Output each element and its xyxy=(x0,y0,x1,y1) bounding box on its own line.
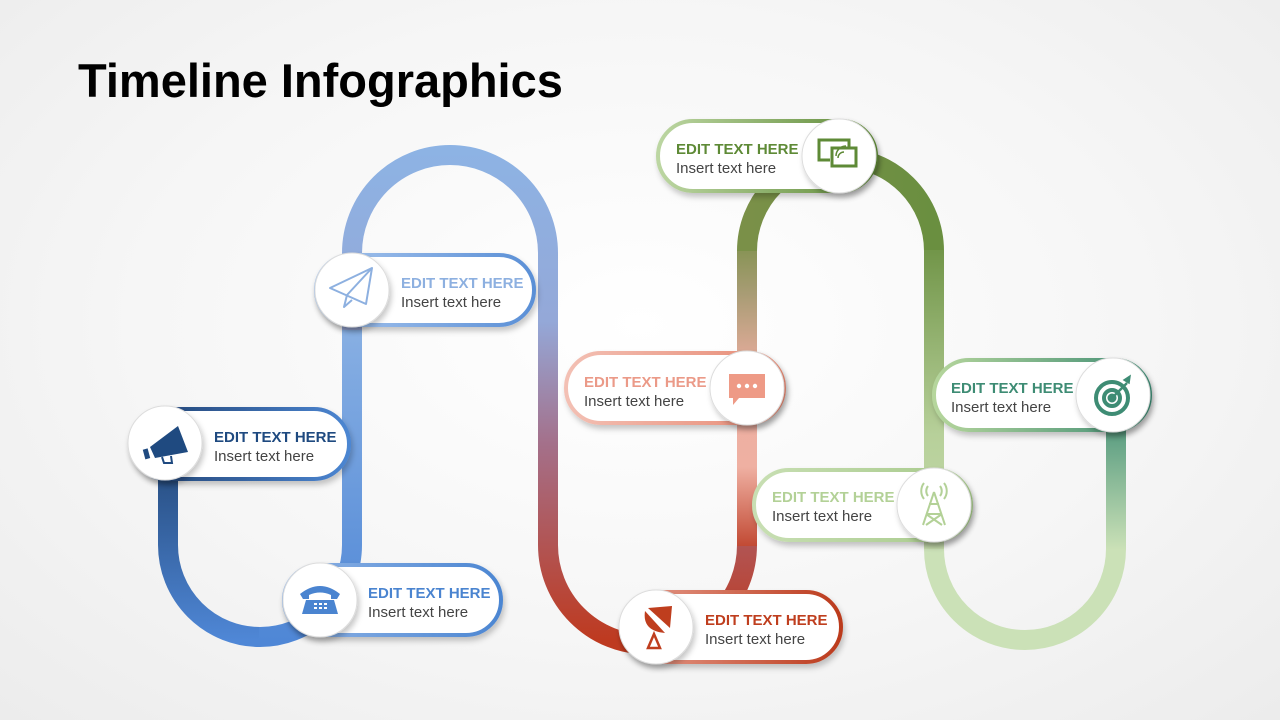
step 2: phone xyxy=(283,563,501,637)
icon: chat bubble xyxy=(729,374,765,405)
step 4: chat: Insert text here xyxy=(584,393,684,410)
step 7: tower xyxy=(754,468,971,542)
icon: radio tower xyxy=(921,483,947,525)
icon: screen cast xyxy=(819,140,856,166)
step 5: satellite dish xyxy=(619,590,841,664)
step 2: phone: EDIT TEXT HERE xyxy=(368,585,491,602)
step 6: screen cast: EDIT TEXT HERE xyxy=(676,141,799,158)
step 5: satellite dish: EDIT TEXT HERE xyxy=(705,612,828,629)
icon: megaphone xyxy=(143,426,188,463)
step 6: screen cast: Insert text here xyxy=(676,160,776,177)
step 2: phone: Insert text here xyxy=(368,604,468,621)
step 3: paper plane: EDIT TEXT HERE xyxy=(401,275,524,292)
step 8: target: Insert text here xyxy=(951,399,1051,416)
icon: paper plane xyxy=(330,268,372,307)
step 6: screen cast xyxy=(658,119,876,193)
step 8: target: EDIT TEXT HERE xyxy=(951,380,1074,397)
title: Timeline Infographics xyxy=(78,54,563,107)
step 7: tower: EDIT TEXT HERE xyxy=(772,489,895,506)
step 3: paper plane xyxy=(315,253,534,327)
step 1: megaphone xyxy=(128,406,349,480)
step 1: megaphone: EDIT TEXT HERE xyxy=(214,429,337,446)
step 4: chat: EDIT TEXT HERE xyxy=(584,374,707,391)
step 4: chat xyxy=(566,351,784,425)
step 7: tower: Insert text here xyxy=(772,508,872,525)
timeline path xyxy=(168,155,1116,644)
step 1: megaphone: Insert text here xyxy=(214,448,314,465)
step 3: paper plane: Insert text here xyxy=(401,294,501,311)
step 5: satellite dish: Insert text here xyxy=(705,631,805,648)
icon: target xyxy=(1096,376,1130,414)
step 8: target xyxy=(934,358,1150,432)
icon: satellite dish xyxy=(645,606,672,648)
icon: telephone xyxy=(300,586,340,614)
